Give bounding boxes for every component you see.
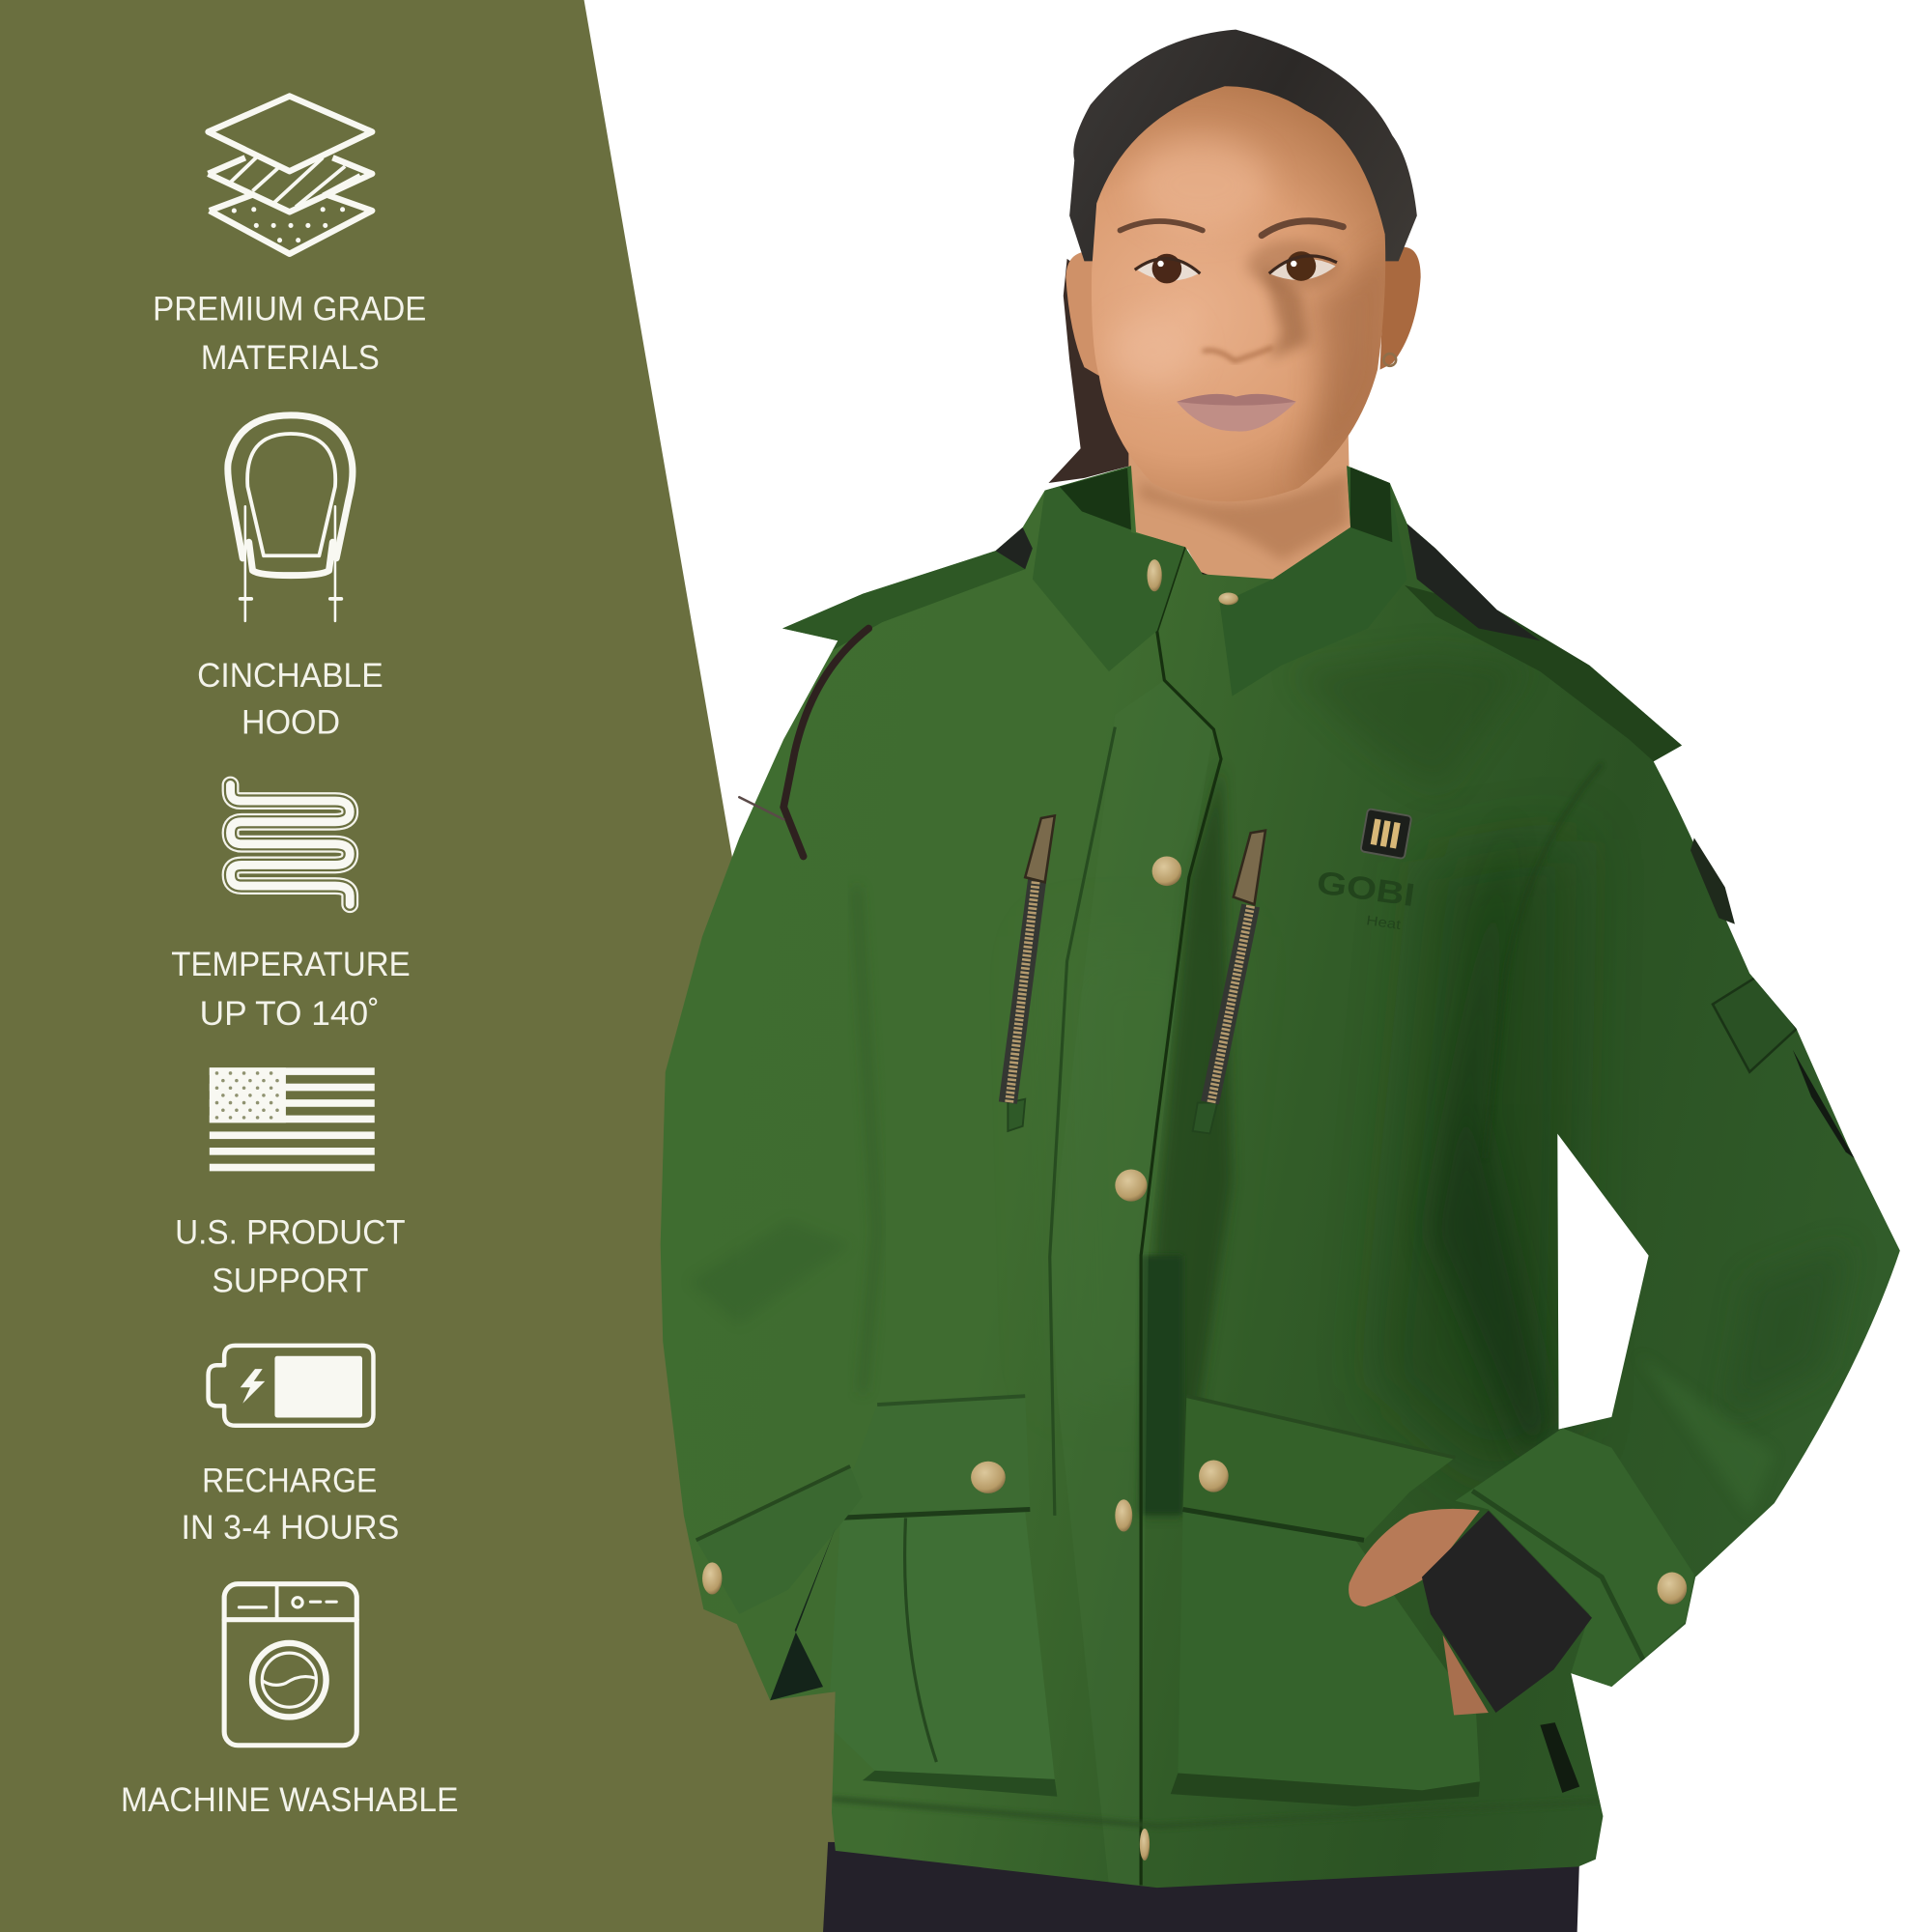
embroidered logo: Heat	[1365, 912, 1402, 932]
label: CINCHABLE	[197, 657, 384, 695]
side tag	[1540, 1722, 1579, 1793]
inner collar opening	[1164, 560, 1233, 757]
label: U.S. PRODUCT	[175, 1214, 406, 1252]
right pocket	[1171, 1396, 1480, 1806]
leggings	[823, 1842, 1579, 1932]
right eye	[1269, 251, 1337, 281]
hem	[832, 1799, 1602, 1826]
nose	[1203, 348, 1273, 361]
earring	[1383, 354, 1396, 366]
black hood lining	[1407, 524, 1540, 640]
embroidered logo: GOBI	[1315, 865, 1417, 914]
feature: cinchable hood: HOOD	[242, 704, 340, 742]
icon: american flag	[210, 1067, 375, 1171]
icon: washing machine	[224, 1584, 356, 1746]
neck	[1128, 419, 1350, 582]
panel: olive feature sidebar	[0, 0, 936, 1932]
jacket shading and folds	[690, 466, 1848, 1886]
embroidered logo	[1312, 865, 1417, 933]
feature: machine washable	[121, 1584, 458, 1819]
ears	[1065, 247, 1421, 376]
hand	[1349, 1509, 1480, 1606]
feature: recharge	[182, 1346, 399, 1547]
icon: hood	[228, 415, 353, 621]
sleeve patch	[1690, 838, 1735, 924]
centre dark gap	[1141, 764, 1233, 1516]
left eye	[1135, 254, 1200, 283]
lips	[1177, 394, 1296, 432]
model photo: woman in green jacket	[661, 30, 1900, 1932]
right zipper	[1193, 831, 1265, 1133]
left hood collar band	[782, 551, 1025, 653]
ponytail	[1048, 259, 1140, 483]
drawstring	[739, 629, 868, 856]
black sleeve slit	[1793, 1050, 1855, 1158]
feature: premium grade materials: MATERIALS	[201, 339, 380, 377]
feature: cinchable hood	[197, 415, 384, 742]
stand collar left	[1033, 466, 1185, 671]
label: TEMPERATURE	[171, 946, 411, 983]
head and face	[1092, 86, 1385, 501]
hood band right	[1405, 585, 1682, 761]
icon: fabric layers	[209, 96, 372, 254]
usb port patch	[1360, 809, 1411, 859]
feature: premium grade materials	[153, 96, 426, 377]
black glove	[1422, 1511, 1592, 1713]
face shading	[1109, 138, 1392, 493]
snap buttons	[702, 559, 1687, 1861]
back hair fill	[1069, 30, 1417, 261]
label: RECHARGE	[202, 1463, 377, 1500]
stand collar right	[1220, 466, 1407, 696]
left zipper	[1008, 815, 1055, 1131]
feature: temperature	[171, 784, 411, 1033]
left pocket	[828, 1396, 1057, 1797]
thumb	[1443, 1635, 1489, 1716]
feature: recharge: IN 3-4 HOURS	[182, 1509, 399, 1547]
inner left sleeve gap	[770, 1528, 836, 1700]
sleeve side pocket	[1713, 974, 1797, 1072]
front placket	[1136, 1255, 1148, 1517]
label: MACHINE WASHABLE	[121, 1781, 458, 1819]
feature: temperature: UP TO 140˚	[200, 995, 380, 1033]
icon: heating element	[231, 784, 350, 904]
jacket body	[661, 466, 1900, 1888]
label: PREMIUM GRADE	[153, 291, 426, 328]
right cuff	[1455, 1428, 1694, 1687]
feature: us product support: SUPPORT	[212, 1262, 368, 1299]
shoulder seam	[1553, 766, 1600, 833]
left cuff	[835, 1515, 848, 1520]
eyebrows	[1120, 221, 1343, 236]
feature: us product support	[175, 1067, 406, 1299]
icon: battery	[209, 1346, 373, 1426]
